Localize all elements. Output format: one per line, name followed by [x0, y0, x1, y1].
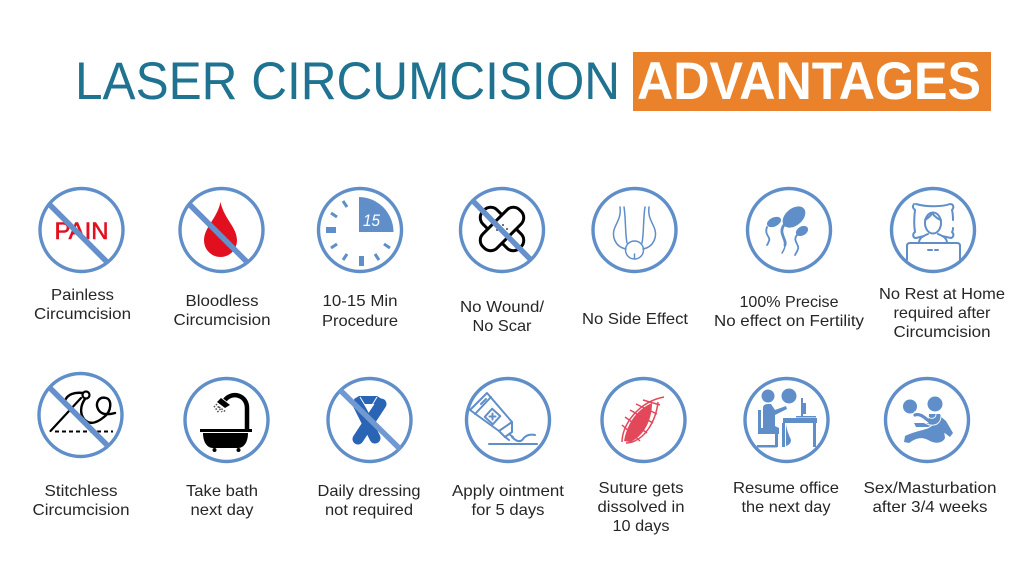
label: No effect on Fertility — [714, 313, 864, 330]
label: for 5 days — [472, 502, 544, 519]
item: no rest at home — [879, 188, 1005, 341]
label: 10-15 Min — [322, 293, 398, 310]
label — [452, 483, 565, 519]
title — [75, 52, 991, 111]
item: apply ointment — [452, 378, 565, 519]
icon: bathtub and shower — [185, 378, 268, 462]
icon: no pain: PAIN — [54, 218, 108, 245]
label: No Scar — [472, 318, 532, 335]
icon: sperm cells — [748, 188, 830, 272]
item: painless circumcision — [34, 188, 131, 323]
label: Circumcision — [32, 502, 130, 519]
label: not required — [325, 502, 413, 519]
item: sex after weeks — [864, 378, 996, 516]
item: no side effect — [582, 188, 689, 328]
icon: no needle and thread — [39, 374, 122, 456]
item: 10-15 min procedure — [318, 188, 402, 330]
icon: no bandage ribbon — [328, 378, 411, 462]
label: Painless — [51, 287, 114, 304]
label: next day — [190, 502, 254, 519]
label: Circumcision — [34, 306, 131, 323]
item: daily dressing not required — [318, 378, 420, 519]
label: the next day — [742, 499, 830, 516]
icon: crossed bandage — [460, 188, 544, 272]
icon: red suture — [602, 378, 685, 462]
label — [322, 293, 398, 330]
label — [460, 299, 545, 335]
label — [864, 480, 996, 516]
item: suture dissolves — [598, 378, 685, 535]
label: Resume office — [733, 480, 839, 497]
item: take bath next day — [185, 378, 268, 519]
label — [714, 294, 864, 330]
icon: no blood drop — [180, 188, 263, 272]
label — [733, 480, 839, 516]
label: Bloodless — [186, 293, 258, 310]
icon: people at desk — [745, 378, 828, 462]
item: 100% precise — [714, 188, 864, 330]
label: No Rest at Home — [879, 286, 1005, 303]
label — [879, 286, 1005, 341]
label — [174, 293, 270, 329]
icon: anatomy outline — [593, 188, 676, 272]
label: dissolved in — [598, 499, 684, 516]
label — [318, 483, 420, 519]
label: Take bath — [186, 483, 258, 500]
icon: timer: 15 — [363, 211, 380, 230]
label — [186, 483, 258, 519]
label: Procedure — [322, 313, 398, 330]
item: resume office — [733, 378, 839, 516]
label: after 3/4 weeks — [872, 499, 988, 516]
label: required after — [894, 305, 991, 322]
label — [32, 483, 130, 519]
label — [34, 287, 131, 323]
item: stitchless circumcision — [32, 374, 130, 519]
label: 100% Precise — [740, 294, 839, 311]
label: Apply ointment — [452, 483, 565, 500]
label: 10 days — [612, 518, 670, 535]
icon: person in bed — [892, 188, 974, 272]
label: Circumcision — [174, 312, 270, 329]
icon: timer — [318, 188, 402, 272]
label: Circumcision — [894, 324, 990, 341]
item: no wound no scar — [460, 188, 545, 335]
item: bloodless circumcision — [174, 188, 270, 329]
label: Sex/Masturbation — [864, 480, 996, 497]
label: Suture gets — [598, 480, 684, 497]
label — [598, 480, 684, 535]
label: No Wound/ — [460, 299, 545, 316]
label: No Side Effect — [582, 311, 689, 328]
icon: ointment tube — [466, 378, 550, 462]
title: laser circumcision: LASER CIRCUMCISION — [75, 52, 620, 111]
title highlight: advantages: ADVANTAGES — [637, 52, 981, 111]
label: Daily dressing — [318, 483, 420, 500]
icon: embracing figures — [886, 378, 968, 462]
label: Stitchless — [44, 483, 118, 500]
